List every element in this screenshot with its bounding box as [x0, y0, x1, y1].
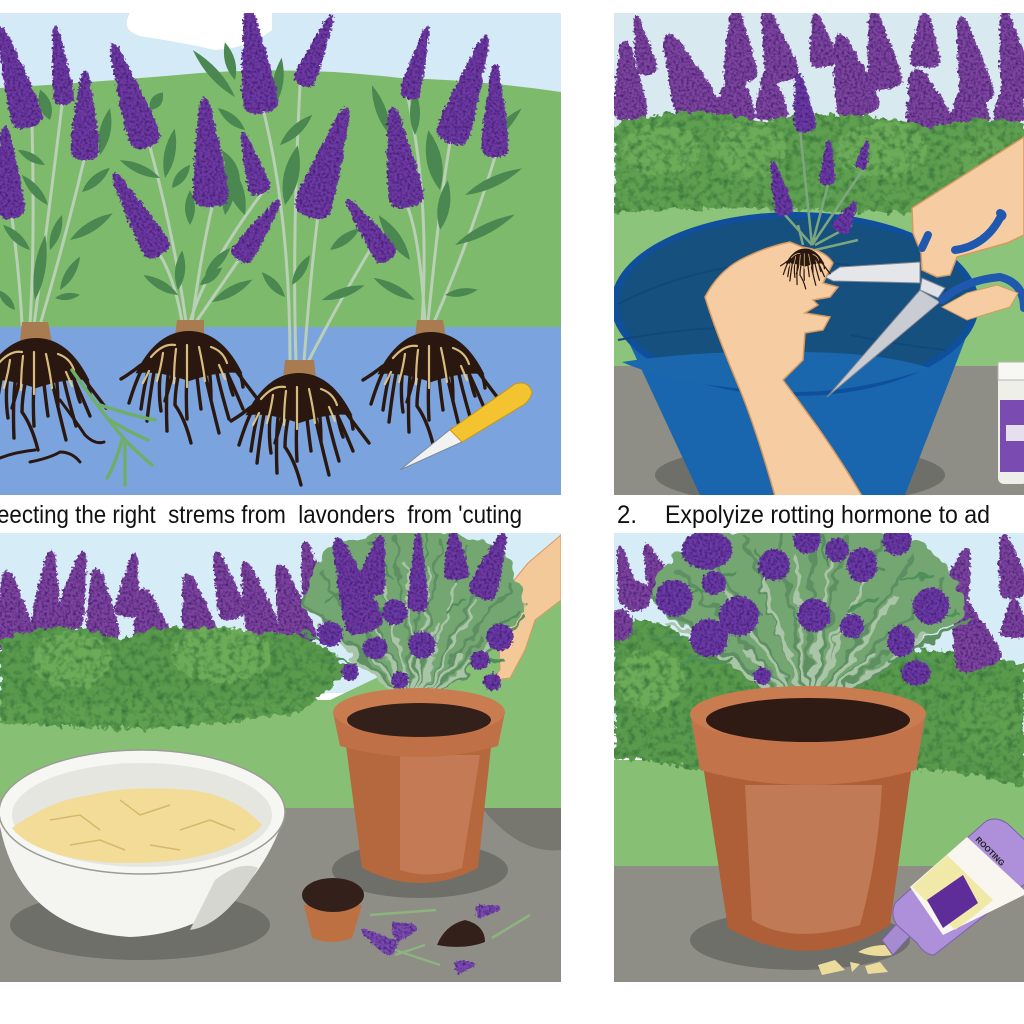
green hills	[0, 70, 561, 327]
panel: applying rooting hormone, cutting in hand over tub	[608, 4, 1024, 505]
bowl shadow	[10, 890, 270, 960]
tub shadow	[655, 458, 945, 495]
knife	[400, 383, 532, 470]
bottle body	[893, 819, 1024, 955]
sky	[614, 13, 1024, 213]
plant stems	[12, 85, 495, 362]
pot shadow	[332, 842, 508, 898]
cutting flowers	[763, 71, 874, 236]
white bowl with perlite	[0, 750, 285, 937]
roots of plant 3	[231, 360, 369, 485]
perlite mix	[12, 788, 262, 863]
far lavender	[614, 13, 1024, 130]
grass	[614, 205, 1024, 375]
cloud	[127, 13, 272, 50]
panel: potting the cutting	[0, 527, 561, 982]
cutting stems and leaves	[785, 130, 866, 250]
lavender plant	[304, 527, 526, 712]
sky	[614, 533, 1024, 733]
scissors pivot	[920, 278, 945, 298]
hand	[492, 535, 561, 680]
far lavender	[607, 531, 1024, 676]
step number: 2.	[617, 501, 637, 529]
foliage	[650, 523, 966, 715]
far lavender	[0, 540, 318, 650]
scattered soil and cuttings	[356, 901, 530, 974]
hedge	[0, 627, 350, 729]
tall flower spikes	[318, 527, 517, 639]
terracotta pot	[690, 686, 926, 951]
table	[0, 808, 561, 982]
roots held in hand	[781, 249, 830, 289]
lower finger on scissors	[942, 285, 1018, 320]
hedge	[614, 112, 1024, 213]
pot shadow	[690, 910, 910, 970]
rooting hormone jar	[998, 362, 1024, 484]
lavender plant	[650, 523, 966, 715]
panel: potted lavender with rooting hormone bottle	[607, 523, 1024, 982]
sky	[0, 533, 561, 693]
scissors blades	[825, 262, 940, 397]
caption 2	[617, 501, 990, 529]
blue tub	[611, 212, 979, 495]
scissors handles	[922, 213, 1024, 308]
small pot with soil	[302, 878, 364, 942]
grass	[0, 590, 561, 815]
powder spill	[818, 945, 892, 975]
right hand holding scissors	[912, 137, 1024, 277]
grass	[614, 760, 1024, 870]
loose cutting and root pieces	[0, 370, 155, 485]
lavender flower spikes	[0, 5, 508, 267]
bottle label text: ROOTING	[974, 835, 1006, 868]
panel: selecting lavender stems with roots	[0, 5, 561, 495]
roots of plant 2	[121, 320, 259, 443]
foliage	[304, 529, 526, 712]
table	[614, 866, 1024, 982]
hedge	[614, 620, 1024, 787]
lavender cutting	[763, 71, 874, 250]
flower clusters	[317, 599, 514, 691]
table	[614, 366, 1024, 496]
bottle neck	[882, 920, 913, 955]
roots of plant 1	[0, 322, 106, 450]
step text: Expolyize rotting hormone to ad	[665, 501, 990, 529]
water-blue ground	[0, 327, 561, 495]
left hand holding cutting	[705, 242, 862, 496]
bottle label	[910, 837, 1024, 935]
roots of plant 4	[363, 320, 501, 444]
terracotta pot	[333, 688, 505, 883]
plant leaves	[0, 41, 525, 313]
sky	[0, 13, 561, 92]
caption 1: eecting the right strems from lavonders from 'cuting	[0, 501, 522, 529]
flower clusters	[656, 526, 949, 686]
rooting hormone bottle	[818, 819, 1024, 975]
